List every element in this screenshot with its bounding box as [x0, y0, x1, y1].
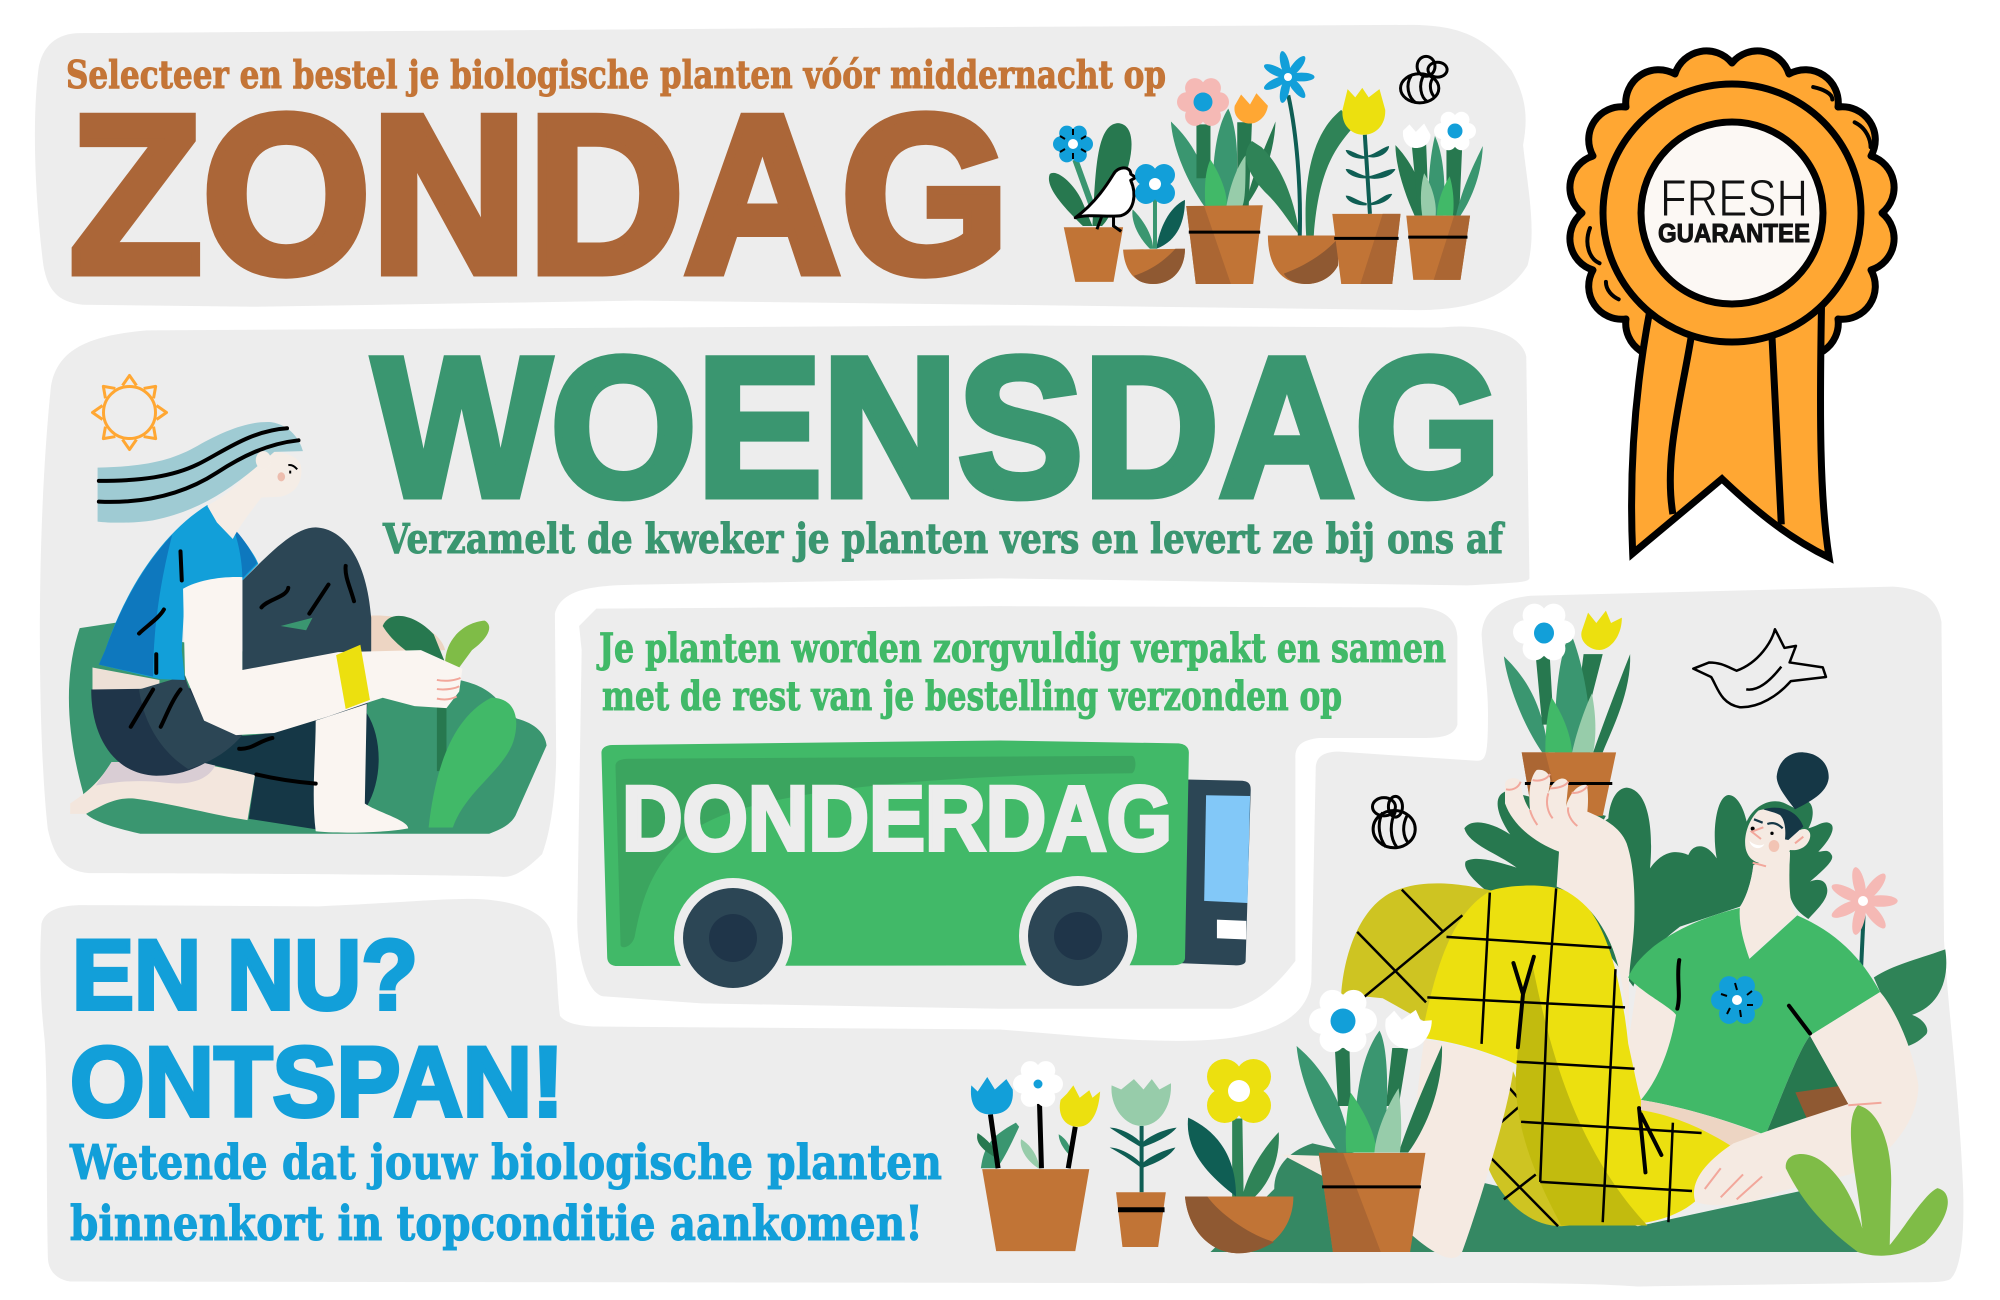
heading: zondag intro: Selecteer en bestel je biologische planten vóór middernacht op: [66, 52, 1166, 97]
pink flower stem: [1861, 915, 1864, 969]
text: woensdag: Verzamelt de kweker je planten vers en levert ze bij ons af: [382, 515, 1505, 563]
heading: ZONDAG: ZONDAG: [70, 68, 1010, 320]
illustration: gardening woman: [69, 422, 547, 834]
heading: EN NU?: EN NU?: [72, 919, 418, 1030]
bushes behind the man: [1558, 788, 1833, 987]
heading: DONDERDAG: DONDERDAG: [622, 768, 1172, 870]
icon: fresh guarantee rosette: [1570, 51, 1894, 558]
rosette rings: [1603, 84, 1861, 342]
text: ontspan line 1: Wetende dat jouw biologische planten: [69, 1135, 942, 1191]
panel: donderdag background: [577, 606, 1457, 1009]
text: donderdag line 2: met de rest van je bestelling verzonden op: [602, 673, 1342, 720]
illustration: potted plants bottom: [971, 1059, 1293, 1253]
panel: en nu background: [40, 587, 1963, 1287]
heading: ONTSPAN!: ONTSPAN!: [70, 1026, 564, 1137]
panel: zondag background: [35, 25, 1532, 310]
panel: woensdag background: [40, 325, 1529, 877]
icon: bee top: [1401, 56, 1447, 103]
rosette scallops: [1570, 51, 1894, 375]
ribbon tails: [1632, 307, 1829, 558]
icon: sun: [92, 376, 166, 450]
raised arm and hand: [1505, 770, 1797, 1044]
illustration: relaxing man with plants: [1210, 604, 1948, 1258]
badge text: FRESH: [1660, 170, 1808, 228]
icon: bird outline: [1693, 629, 1826, 707]
icon: bee middle: [1372, 796, 1415, 848]
lime plant: [1786, 1105, 1948, 1256]
text: donderdag line 1: Je planten worden zorgvuldig verpakt en samen: [597, 625, 1446, 672]
shorts: [1628, 978, 1676, 1100]
back leg: [1341, 883, 1491, 1023]
front pot: [1297, 1046, 1351, 1152]
shirt: [1628, 908, 1880, 1135]
lifted pot: [1504, 656, 1549, 752]
text: ontspan line 2: binnenkort in topconditie aankomen!: [70, 1196, 923, 1252]
heading: WOENSDAG: WOENSDAG: [373, 316, 1501, 538]
illustration: delivery truck: [601, 740, 1251, 998]
icon: fresh guarantee rosette: GUARANTEE: [1658, 218, 1810, 248]
front leg: [1282, 1155, 1322, 1176]
illustration: zondag plants: [1049, 50, 1483, 284]
man's head: [1745, 752, 1829, 866]
